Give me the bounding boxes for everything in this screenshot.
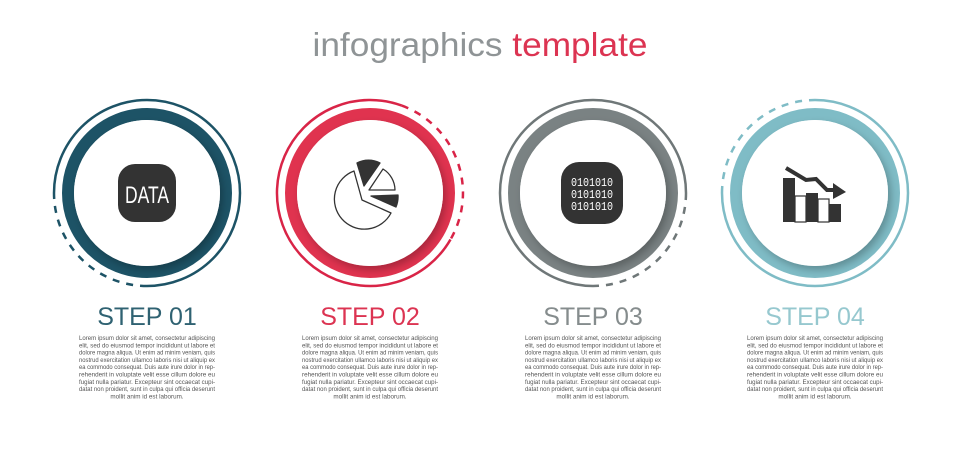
text block: step 03 [525, 335, 662, 400]
text block: step 02: mollit anim id est laborum. [333, 393, 407, 400]
text block: step 01: elit, sed do eiusmod tempor incididunt ut labore et [79, 342, 215, 349]
text block: step 04 [747, 335, 884, 400]
text block: step 03: nostrud exercitation ullamco laboris nisi ut aliquip ex [525, 357, 662, 364]
text block: step 01: rehenderit in voluptate velit esse cillum dolore eu [79, 372, 215, 378]
text block: step 03: elit, sed do eiusmod tempor incididunt ut labore et [525, 342, 661, 349]
text block: step 03: rehenderit in voluptate velit esse cillum dolore eu [525, 372, 661, 378]
ring: step 02 [277, 100, 463, 286]
text block: step 03: mollit anim id est laborum. [556, 393, 630, 400]
panel: step 03 [500, 100, 686, 400]
text block: step 04: rehenderit in voluptate velit esse cillum dolore eu [747, 372, 883, 378]
icon: binary badge: 0101010 [571, 176, 613, 190]
panel: step 04 [722, 100, 908, 400]
heading: step 02: STEP 02 [320, 303, 420, 331]
icon: data badge: DATA [125, 182, 169, 209]
text block: step 02: dolore magna aliqua. Ut enim ad minim veniam, quis [302, 350, 438, 357]
text block: step 03: Lorem ipsum dolor sit amet, consectetur adipiscing [525, 335, 661, 342]
text block: step 01 [79, 335, 216, 400]
panel: step 02 [277, 100, 463, 400]
text block: step 03: fugiat nulla pariatur. Excepteur sint occaecat cupi- [525, 379, 661, 386]
heading: step 03: STEP 03 [543, 303, 643, 331]
text block: step 02: rehenderit in voluptate velit esse cillum dolore eu [302, 372, 438, 378]
text block: step 04: ea commodo consequat. Duis aute irure dolor in rep- [747, 364, 883, 371]
text block: step 02: nostrud exercitation ullamco laboris nisi ut aliquip ex [302, 357, 439, 364]
heading: step 01: STEP 01 [97, 303, 197, 331]
text block: step 03: datat non proident, sunt in culpa qui officia deserunt [525, 386, 661, 393]
text block: step 02: datat non proident, sunt in culpa qui officia deserunt [302, 386, 438, 393]
icon: binary badge [561, 162, 623, 224]
ring: step 03 [500, 100, 686, 286]
text block: step 03: dolore magna aliqua. Ut enim ad minim veniam, quis [525, 350, 661, 357]
icon: pie chart [334, 160, 398, 229]
text block: step 01: ea commodo consequat. Duis aute irure dolor in rep- [79, 364, 215, 371]
text block: step 04: dolore magna aliqua. Ut enim ad minim veniam, quis [747, 350, 883, 357]
text block: step 04: nostrud exercitation ullamco laboris nisi ut aliquip ex [747, 357, 884, 364]
text block: step 02 [302, 335, 439, 400]
text block: step 04: mollit anim id est laborum. [778, 393, 852, 400]
text block: step 01: nostrud exercitation ullamco laboris nisi ut aliquip ex [79, 357, 216, 364]
text block: step 02: elit, sed do eiusmod tempor incididunt ut labore et [302, 342, 438, 349]
icon: declining bar chart [783, 168, 846, 222]
text block: step 01: Lorem ipsum dolor sit amet, consectetur adipiscing [79, 335, 215, 342]
text block: step 01: fugiat nulla pariatur. Excepteur sint occaecat cupi- [79, 379, 215, 386]
text block: step 04: datat non proident, sunt in culpa qui officia deserunt [747, 386, 883, 393]
ring: step 01 [54, 100, 240, 286]
text block: step 04: Lorem ipsum dolor sit amet, consectetur adipiscing [747, 335, 883, 342]
ring: step 04 [722, 100, 908, 286]
text block: step 02: fugiat nulla pariatur. Excepteur sint occaecat cupi- [302, 379, 438, 386]
text block: step 01: dolore magna aliqua. Ut enim ad minim veniam, quis [79, 350, 215, 357]
text block: step 01: datat non proident, sunt in culpa qui officia deserunt [79, 386, 215, 393]
text block: step 01: mollit anim id est laborum. [110, 393, 184, 400]
heading: step 04: STEP 04 [765, 303, 865, 331]
panel: step 01 [54, 100, 240, 400]
text block: step 04: elit, sed do eiusmod tempor incididunt ut labore et [747, 342, 883, 349]
text block: step 02: ea commodo consequat. Duis aute irure dolor in rep- [302, 364, 438, 371]
text block: step 04: fugiat nulla pariatur. Excepteur sint occaecat cupi- [747, 379, 883, 386]
text block: step 02: Lorem ipsum dolor sit amet, consectetur adipiscing [302, 335, 438, 342]
title: infographics template [312, 26, 648, 63]
text block: step 03: ea commodo consequat. Duis aute irure dolor in rep- [525, 364, 661, 371]
icon: data badge [118, 164, 176, 222]
icon: binary badge: 0101010 [571, 200, 613, 214]
icon: binary badge: 0101010 [571, 188, 613, 202]
